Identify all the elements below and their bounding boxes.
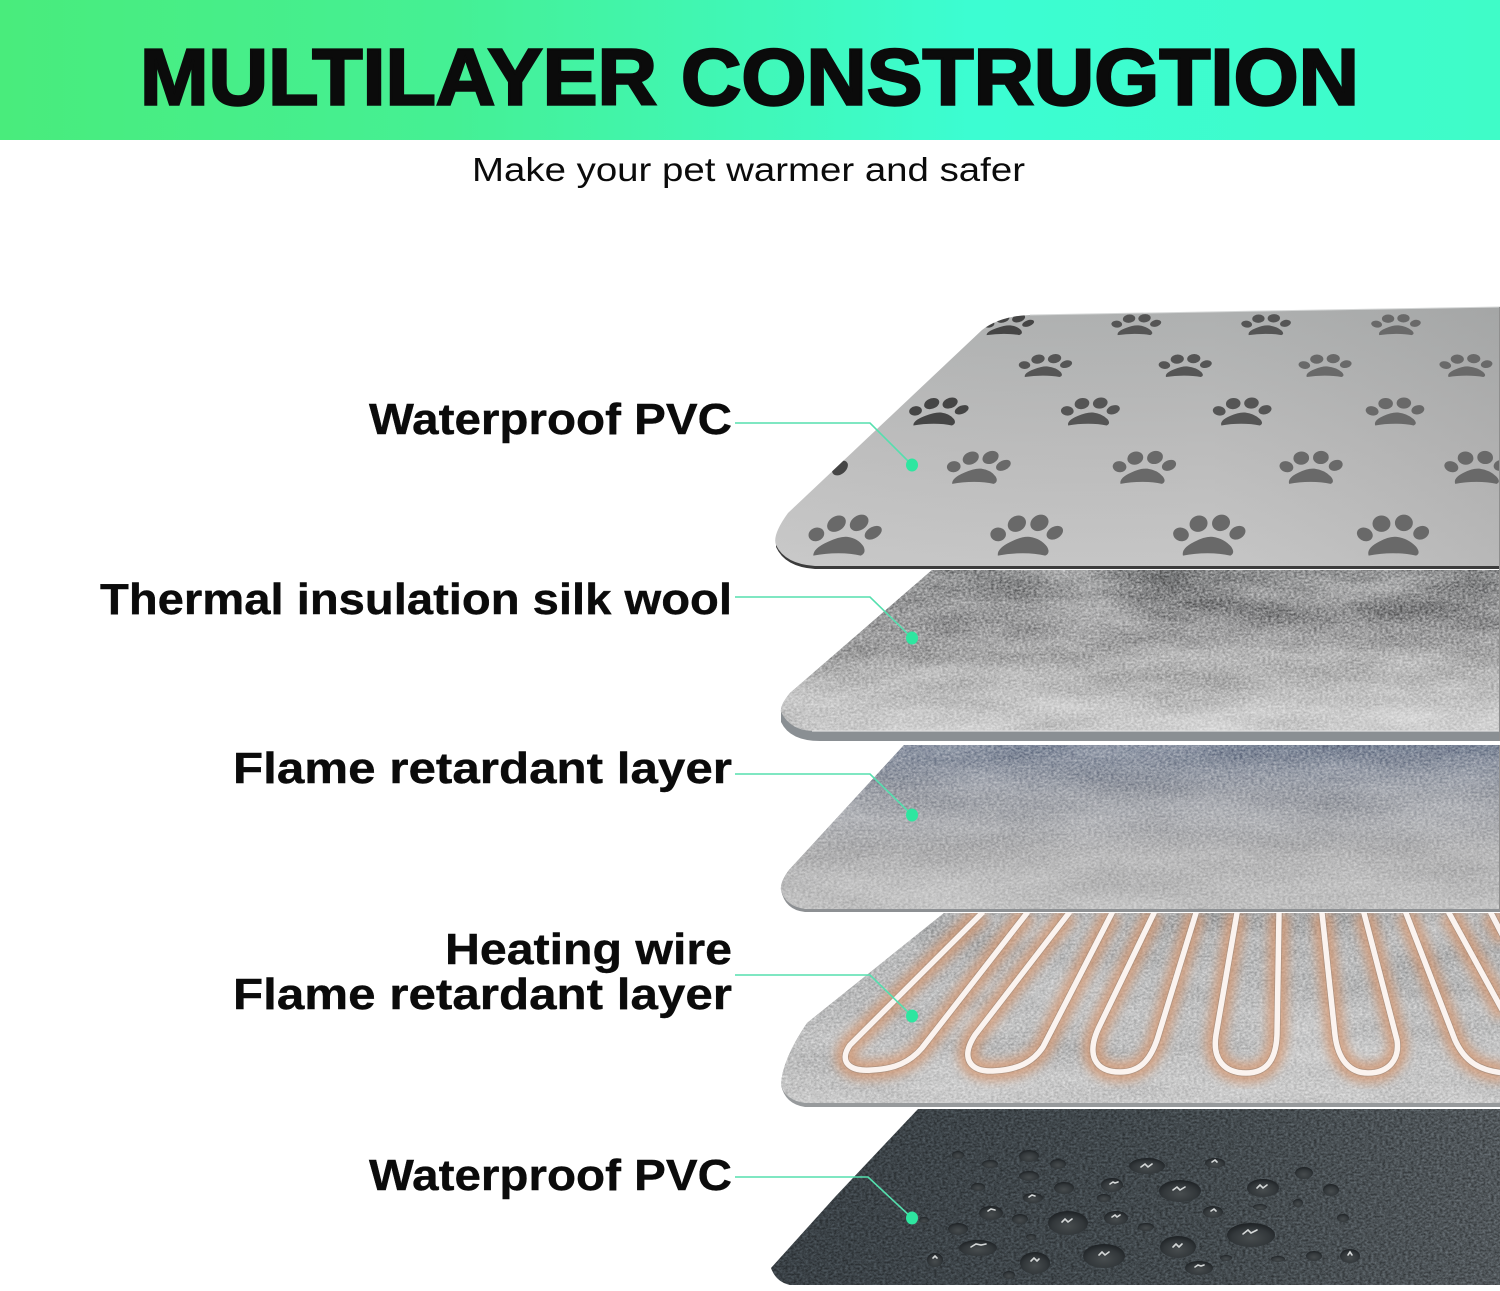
leader line 1 [735, 423, 918, 472]
water drops [919, 1150, 1360, 1279]
title: CONSTRUGTION [681, 32, 1359, 122]
layer 2: thermal insulation silk wool [780, 570, 1500, 741]
wire glow [845, 913, 1500, 1073]
leader line 2 [735, 597, 918, 644]
leader line 3 [735, 774, 918, 822]
label: Heating wire and flame retardant layer [233, 925, 732, 1019]
drop highlights [933, 1160, 1352, 1267]
label: Waterproof PVC top: Waterproof PVC [369, 395, 732, 444]
layer 5: dark waterproof PVC with water drops [770, 1105, 1500, 1287]
header band [0, 0, 1500, 140]
label: Heating wire and flame retardant layer: Flame retardant layer [233, 970, 732, 1019]
label: Heating wire and flame retardant layer: Heating wire [445, 925, 732, 974]
leader line 5 [735, 1177, 918, 1224]
title: MULTILAYER [140, 32, 657, 122]
leader line 4 [735, 975, 918, 1022]
label: Waterproof PVC bottom: Waterproof PVC [369, 1151, 732, 1200]
label: Flame retardant layer: Flame retardant layer [233, 744, 732, 793]
heating wire shadow [845, 913, 1500, 1073]
layer 4: heating wire on flame retardant layer [780, 913, 1500, 1107]
heating wires [845, 913, 1500, 1073]
label: Thermal insulation silk wool: Thermal insulation silk wool [100, 575, 732, 624]
title [140, 32, 1359, 122]
paw prints [799, 314, 1500, 556]
layer 3: flame retardant layer [780, 745, 1500, 912]
layer 1: waterproof PVC with paw prints [775, 307, 1500, 910]
subtitle: Make your pet warmer and safer [472, 151, 1025, 188]
